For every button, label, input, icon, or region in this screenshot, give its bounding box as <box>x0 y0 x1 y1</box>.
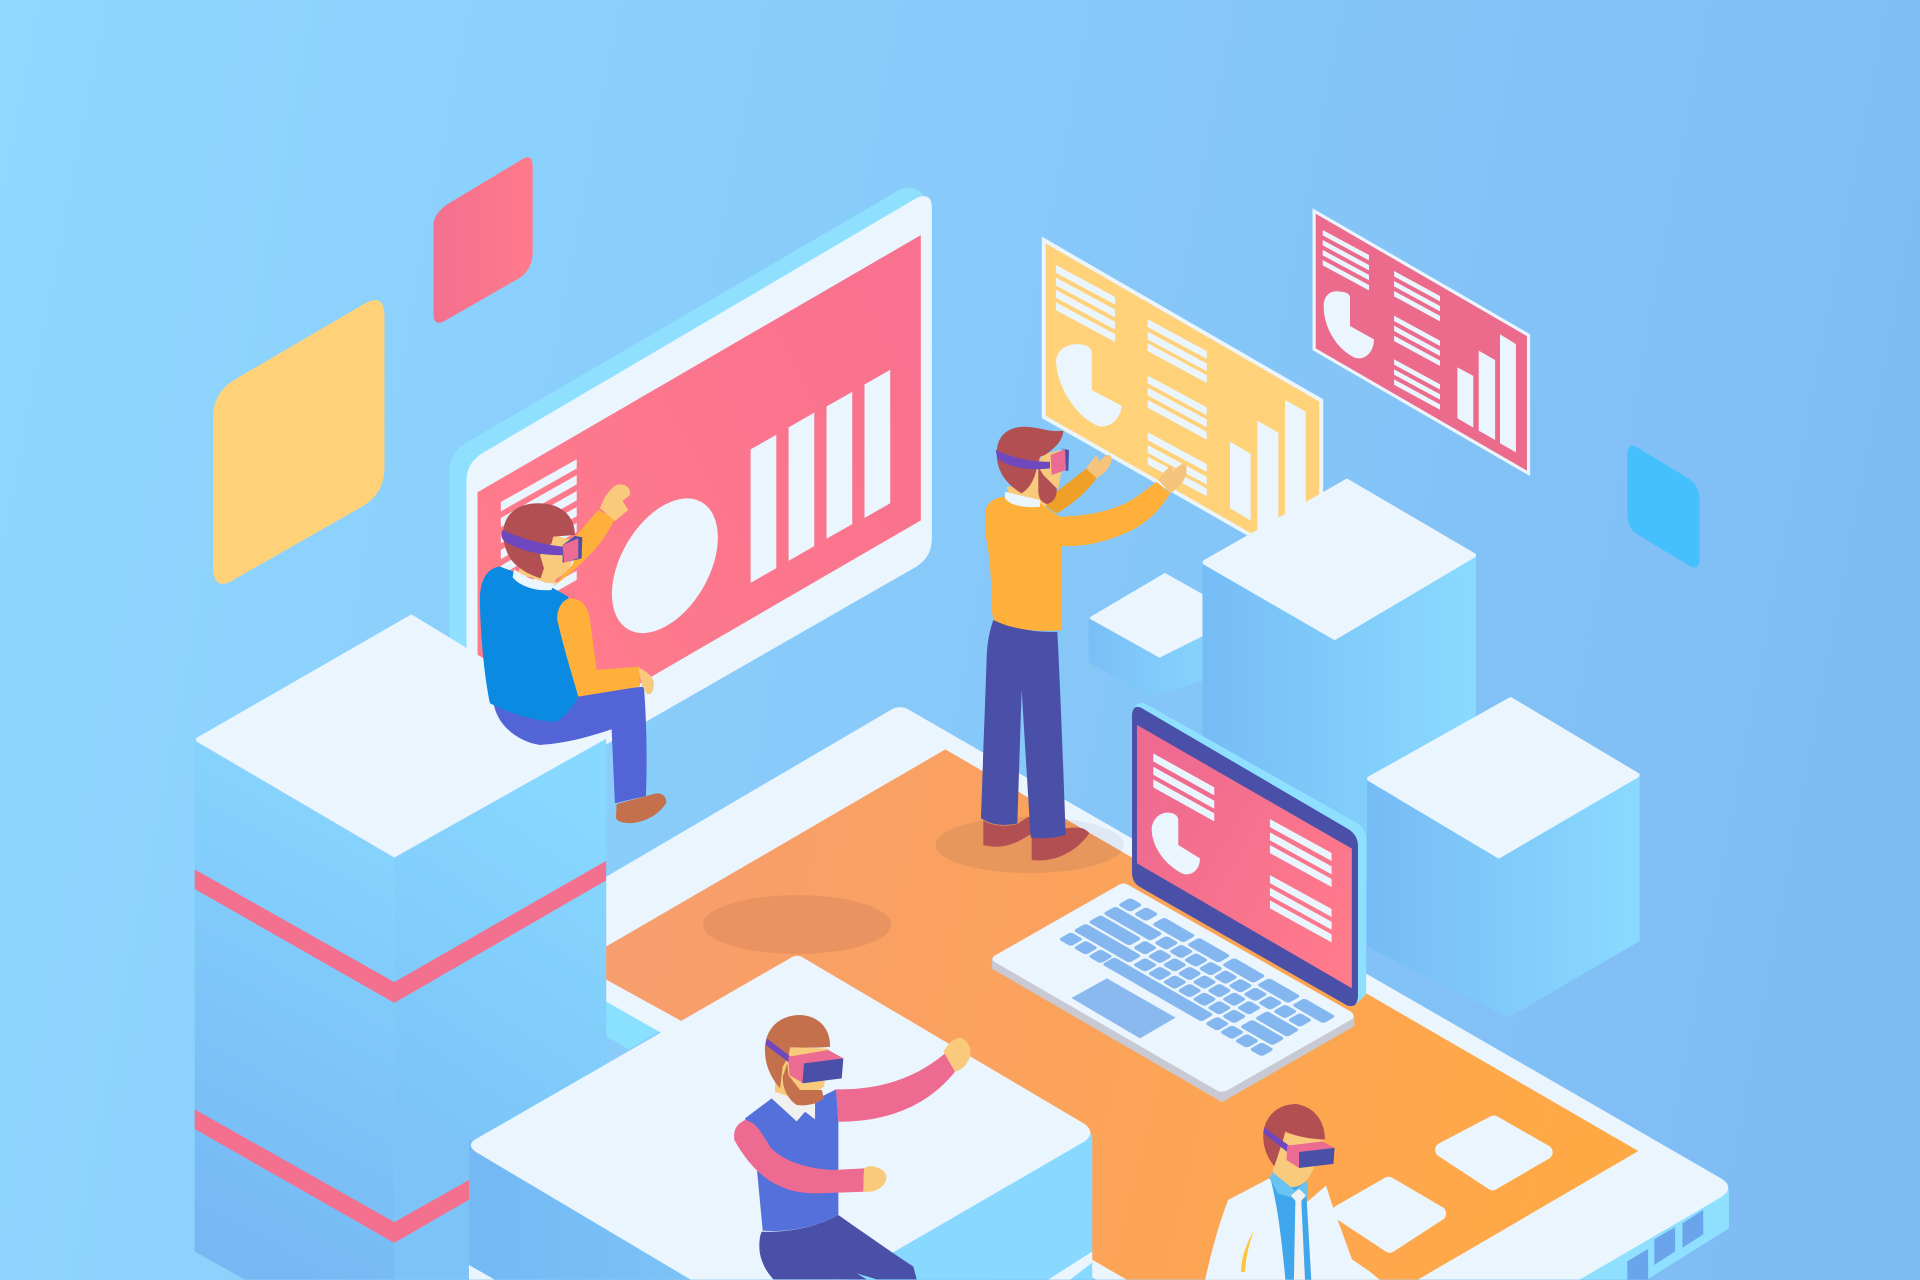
monitor bar chart <box>751 370 890 583</box>
front block stripes <box>469 1251 1092 1280</box>
raised hand <box>600 484 630 521</box>
floating yellow tile <box>213 300 384 584</box>
vest <box>745 1089 838 1231</box>
standing person <box>981 427 1187 860</box>
laptop <box>992 703 1366 1102</box>
face <box>1272 1133 1324 1187</box>
headset strap <box>1263 1127 1289 1152</box>
floor shadow under standing person <box>936 817 1124 873</box>
laptop base thickness <box>992 959 1354 1102</box>
yellow panel text lines <box>1056 265 1207 496</box>
left block top <box>198 617 606 855</box>
floating blue tile <box>1627 446 1700 568</box>
collar <box>772 1092 815 1121</box>
hair <box>503 503 575 578</box>
trousers <box>981 620 1066 838</box>
front block top <box>471 956 1090 1280</box>
laptop keyboard deck <box>992 883 1354 1092</box>
orange floor inlay <box>606 749 1638 1280</box>
shoes <box>983 817 1089 860</box>
pink panel background <box>1314 211 1529 473</box>
laptop screen contents <box>1152 753 1332 942</box>
platform side <box>1573 1190 1729 1280</box>
headset front <box>563 538 578 563</box>
lower hand <box>638 667 654 694</box>
monitor red screen <box>478 235 921 778</box>
platform ports <box>1627 1210 1703 1280</box>
front block <box>469 956 1092 1280</box>
collar <box>1005 492 1040 507</box>
front block right side <box>833 1134 1092 1280</box>
collar <box>513 569 553 590</box>
yellow panel pie <box>1056 344 1122 427</box>
tall right block <box>1202 481 1476 882</box>
near hand <box>1158 463 1187 493</box>
yellow panel background <box>1044 240 1321 576</box>
person in white coat <box>1205 1104 1380 1280</box>
laptop lid frame <box>1132 707 1358 1006</box>
headset <box>563 536 582 563</box>
monitor text lines <box>501 459 577 623</box>
laptop trackpad <box>1071 978 1176 1038</box>
shirt collar <box>1270 1172 1308 1200</box>
headset strap <box>501 530 564 555</box>
small block <box>1089 574 1206 697</box>
yellow panel bars <box>1230 400 1306 557</box>
neck <box>1007 487 1047 507</box>
raised arm <box>553 510 615 587</box>
raised hand <box>943 1038 970 1072</box>
pink floating panel <box>1314 211 1529 473</box>
tall left block <box>195 617 606 1280</box>
tall block top <box>1205 481 1474 637</box>
front block left side <box>469 1139 698 1280</box>
person kneeling on front block <box>734 1015 970 1279</box>
monitor back edge <box>449 188 924 735</box>
hair <box>997 427 1063 493</box>
floor tile 2 <box>1340 1184 1439 1245</box>
platform white top <box>606 707 1728 1280</box>
yellow floating panel <box>1044 240 1321 576</box>
right cube top <box>1369 700 1637 856</box>
floor tile 1 <box>1442 1123 1545 1183</box>
far hand <box>1086 455 1112 478</box>
headset strap <box>766 1038 791 1063</box>
forward arm <box>734 1120 864 1193</box>
hair <box>765 1015 830 1088</box>
monitor ellipse chart <box>590 480 740 651</box>
tall block sides <box>1202 555 1476 882</box>
orange sweater <box>985 482 1170 631</box>
face <box>775 1047 828 1097</box>
platform left edge <box>606 1002 659 1049</box>
trousers <box>759 1215 917 1279</box>
raised arm <box>836 1053 955 1122</box>
face <box>540 535 572 580</box>
headset <box>1060 448 1069 471</box>
hair <box>1263 1104 1325 1166</box>
monitor white frame <box>467 196 932 808</box>
small block top <box>1091 574 1206 656</box>
tie <box>1291 1189 1306 1280</box>
laptop screen <box>1137 725 1352 988</box>
right cube sides <box>1367 774 1640 1018</box>
laptop lid back edge <box>1134 703 1366 1007</box>
left block right side <box>394 737 606 1280</box>
person sitting on block <box>480 484 666 823</box>
beard <box>783 1063 824 1105</box>
pink panel bars <box>1457 334 1516 452</box>
lower arm <box>557 598 640 697</box>
headset front <box>802 1058 843 1083</box>
neck <box>775 1080 815 1112</box>
left block left side <box>195 742 394 1280</box>
laptop keys <box>1059 898 1335 1057</box>
pink panel pie <box>1324 291 1374 358</box>
white coat <box>1205 1179 1380 1280</box>
small block side <box>1089 618 1206 697</box>
headset front <box>1299 1148 1335 1168</box>
legs <box>493 687 647 803</box>
forward hand <box>863 1166 886 1192</box>
right cube <box>1367 700 1640 1018</box>
far arm <box>1042 468 1097 513</box>
coat accent <box>1241 1230 1254 1272</box>
floor platform <box>606 707 1729 1280</box>
floating red tile <box>433 157 533 323</box>
pink panel text lines <box>1323 230 1440 410</box>
left block pink stripes <box>195 861 606 1243</box>
headset body <box>788 1050 843 1083</box>
floor shadow on white <box>936 817 1124 873</box>
headset body <box>1287 1141 1335 1168</box>
neck <box>518 565 557 585</box>
blue vest <box>480 567 578 722</box>
blue shirt <box>1271 1179 1311 1280</box>
floor shadow left <box>703 895 891 954</box>
headset strap <box>996 450 1050 469</box>
large monitor with dashboard <box>449 188 932 808</box>
beard <box>1038 467 1057 504</box>
headset front <box>1051 449 1066 475</box>
shoe <box>616 793 666 823</box>
face <box>1025 450 1062 498</box>
